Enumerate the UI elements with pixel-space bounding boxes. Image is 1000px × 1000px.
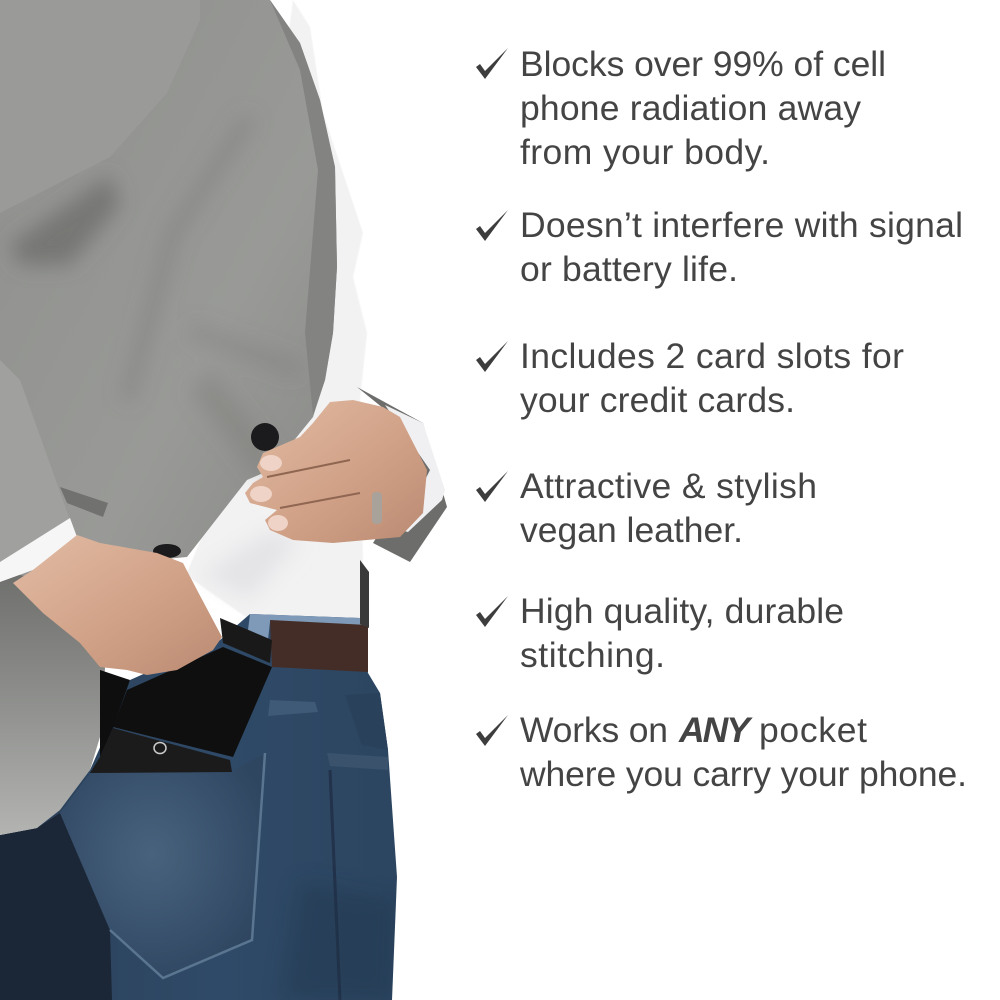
lower sleeve (0, 360, 70, 562)
button (251, 423, 279, 451)
side pocket (327, 753, 388, 770)
lower jacket panel (0, 570, 105, 835)
upper sleeve (0, 0, 200, 213)
benefit 5 (476, 591, 844, 675)
icon: check mark (476, 596, 508, 627)
benefit 6: ANY (678, 710, 753, 750)
shirt (186, 0, 367, 620)
benefit 5: stitching. (520, 635, 665, 675)
benefit 5: High quality, durable (520, 591, 844, 631)
benefit 6: where you carry your phone. (519, 754, 967, 794)
lapel (270, 0, 337, 415)
dark left leg (0, 813, 112, 1000)
benefit 3 (476, 336, 904, 420)
logo on pouch (154, 742, 166, 754)
benefit 6: Works on (520, 710, 668, 750)
right hand (245, 400, 427, 543)
benefit 1: Blocks over 99% of cell (520, 44, 886, 84)
benefit 1: phone radiation away (520, 88, 861, 128)
benefit 4: Attractive & stylish (520, 466, 817, 506)
icon: check mark (476, 210, 508, 241)
phone pouch (90, 618, 272, 773)
benefit 6: pocket (759, 710, 867, 750)
belt (270, 620, 368, 672)
shirt cuff (0, 518, 77, 582)
benefit 2 (476, 205, 963, 289)
benefit 1 (476, 44, 886, 172)
icon: check mark (476, 341, 508, 372)
benefit 3: Includes 2 card slots for (520, 336, 904, 376)
benefit 4: vegan leather. (520, 510, 743, 550)
photo: man sliding phone pouch into jeans back pocket (0, 0, 447, 1000)
back pocket (60, 753, 265, 978)
benefit 2: Doesn’t interfere with signal (520, 205, 963, 245)
jacket back and sleeve behind right hand (357, 387, 447, 562)
jacket (0, 0, 337, 835)
icon: check mark (476, 48, 508, 79)
benefit 4 (476, 466, 817, 550)
icon: check mark (476, 471, 508, 502)
benefit 2: or battery life. (520, 249, 738, 289)
benefit 1: from your body. (520, 132, 770, 172)
icon: check mark (476, 715, 508, 746)
jacket pocket flap (60, 487, 108, 517)
benefit 6 (476, 710, 967, 794)
benefit 3: your credit cards. (520, 380, 795, 420)
left hand (13, 535, 222, 675)
jeans (0, 614, 397, 1000)
fold shadows (10, 117, 300, 470)
